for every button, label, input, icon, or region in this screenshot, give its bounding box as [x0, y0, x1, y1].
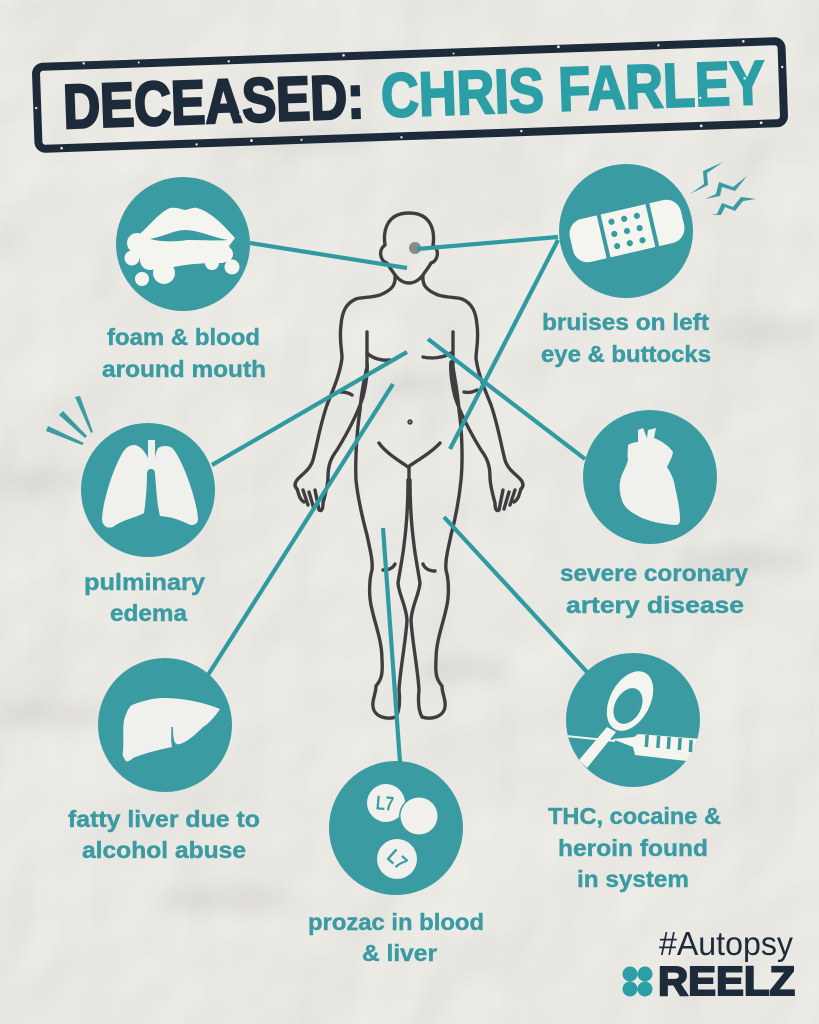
right hand and leg — [410, 332, 521, 718]
label: coronary: severe coronary — [560, 560, 748, 586]
navel — [409, 421, 411, 423]
line: syringe — [444, 517, 587, 672]
groin and centre line — [379, 443, 440, 505]
title: deceased: DECEASED: — [62, 63, 365, 142]
label: fatty liver: fatty liver due to — [68, 806, 260, 832]
body outline — [295, 213, 523, 718]
label: pulminary edema: edema — [110, 600, 188, 626]
label: bruises: bruises on left — [542, 309, 709, 335]
line: liver — [208, 384, 393, 675]
left hand — [297, 332, 408, 718]
label: drugs: in system — [577, 866, 689, 892]
label: pulminary edema: pulminary — [84, 569, 205, 595]
pill imprint top: L7 — [375, 792, 395, 816]
line: eye — [417, 237, 558, 249]
icon: spoon and syringe — [566, 653, 702, 787]
label: coronary: artery disease — [566, 592, 744, 618]
line: heart — [428, 339, 585, 459]
icon: rays by lungs — [46, 396, 93, 445]
stamp speckles — [33, 38, 785, 151]
label: foam and blood: around mouth — [102, 356, 266, 382]
icon: heart — [583, 410, 717, 544]
icon: pills — [329, 761, 463, 895]
line: pills — [383, 528, 400, 762]
label: prozac: prozac in blood — [308, 909, 484, 935]
line: lungs — [212, 352, 407, 465]
bruise spot on eye — [409, 242, 421, 254]
logo: reelz — [622, 958, 795, 1004]
icon: bandage — [559, 164, 693, 298]
icon: liver — [98, 658, 232, 792]
line: buttocks — [450, 240, 558, 449]
hashtag: #Autopsy — [659, 925, 793, 962]
logo dots — [622, 966, 652, 996]
line: mouth — [250, 243, 407, 268]
label: prozac: & liver — [362, 940, 437, 966]
logo wordmark: REELZ — [658, 958, 795, 1004]
icon: foaming lips — [116, 177, 250, 311]
title stamp — [33, 38, 785, 151]
label: drugs: THC, cocaine & — [548, 803, 721, 829]
icon: bruise zigzags — [690, 162, 756, 215]
icon: lungs — [81, 423, 215, 557]
head — [295, 213, 523, 489]
pill imprint bottom: L7 — [382, 846, 411, 875]
connector lines — [208, 237, 587, 762]
stamp border — [36, 41, 784, 149]
paper shading — [0, 130, 810, 914]
label: fatty liver: alcohol abuse — [82, 837, 246, 863]
label: drugs: heroin found — [558, 835, 708, 861]
label: bruises: eye & buttocks — [541, 341, 711, 367]
chest and arm creases — [341, 353, 477, 571]
label: foam and blood: foam & blood — [107, 324, 260, 350]
